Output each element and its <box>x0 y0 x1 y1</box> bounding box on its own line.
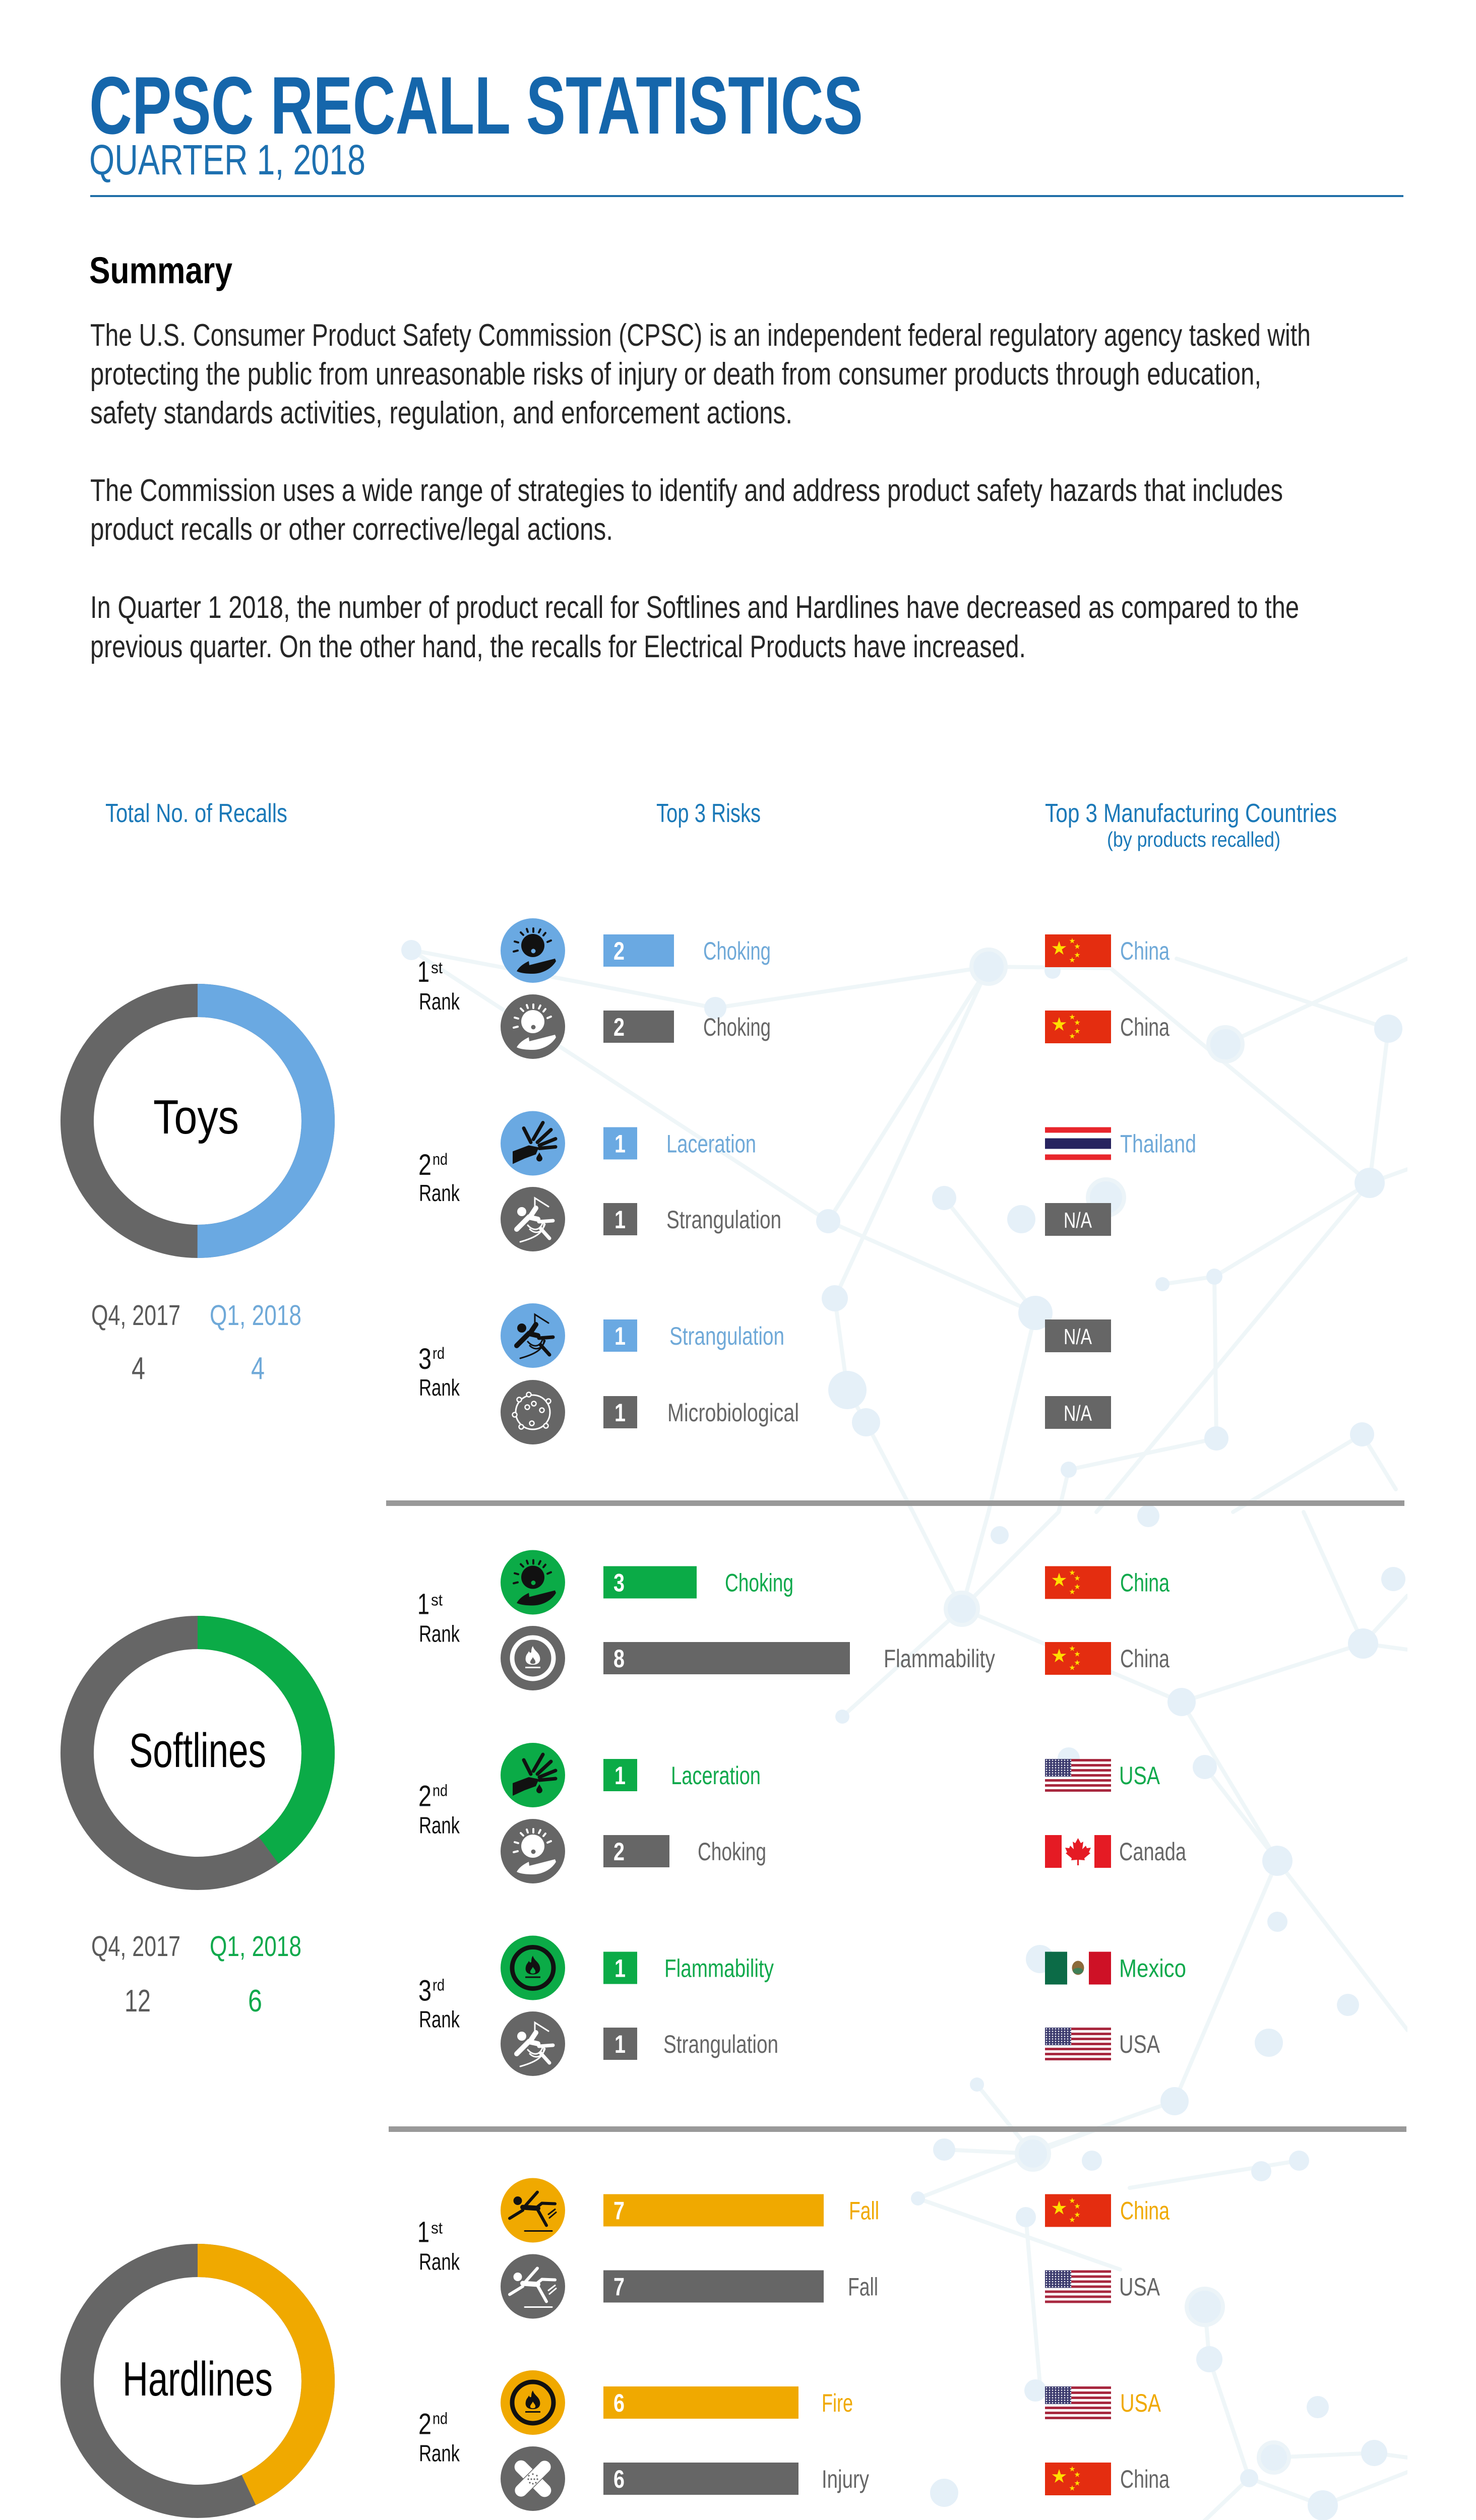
risk label: Laceration <box>666 1130 756 1158</box>
country: China <box>1120 2196 1170 2225</box>
flag: China <box>1045 2194 1111 2227</box>
risk label: Laceration <box>671 1761 761 1790</box>
risk label: Strangulation <box>663 2030 778 2058</box>
row: 1st rank Q4 2017 <box>501 1626 1170 1690</box>
bar: 6 <box>613 2389 625 2417</box>
bar: 1 <box>614 1322 626 1350</box>
risk label: Microbiological <box>667 1399 799 1427</box>
country: USA <box>1119 2273 1160 2301</box>
country: not available: N/A <box>1064 1208 1092 1233</box>
summary heading: Summary <box>89 249 232 291</box>
row: 1st rank Q4 2017 <box>501 994 1170 1059</box>
donut: hardlines <box>77 2260 318 2501</box>
quarter comparison <box>91 1299 301 1386</box>
rank labels: st <box>431 959 443 977</box>
row: 1st rank Q4 2017 <box>501 2254 1160 2318</box>
risk label: Flammability <box>664 1955 774 1983</box>
rank labels: rd <box>433 1344 445 1362</box>
panel: toys <box>77 918 1196 1444</box>
donut label: Hardlines <box>122 2352 273 2406</box>
risk label: Fall <box>848 2273 878 2301</box>
rank labels: Rank <box>419 1621 460 1647</box>
bar: 2 <box>613 1838 625 1866</box>
icon: choking <box>501 1550 565 1615</box>
bar: 1 <box>614 2030 626 2058</box>
flag: China <box>1045 1566 1111 1599</box>
row: 2nd rank Q1 2018 <box>501 2370 1161 2435</box>
row: 1st rank Q1 2018 <box>501 2178 1170 2243</box>
flag: China <box>1045 1642 1111 1675</box>
flag: Thailand <box>1045 1127 1111 1160</box>
summary text block: product recalls or other corrective/legal actions. <box>90 512 613 547</box>
quarter comparison: Q1, 2018 <box>210 1930 301 1963</box>
panel: hardlines <box>77 2178 1170 2520</box>
risk label: Strangulation <box>666 1206 781 1234</box>
quarter comparison: 4 <box>251 1351 265 1386</box>
rank labels: st <box>431 1591 443 1609</box>
country: not available: N/A <box>1064 1401 1092 1426</box>
quarter comparison: 4 <box>132 1351 145 1386</box>
icon: strangulation <box>501 1187 565 1251</box>
subtitle: QUARTER 1, 2018 <box>89 136 365 183</box>
risk label: Choking <box>698 1838 766 1866</box>
icon: choking <box>501 918 565 983</box>
country: not available: N/A <box>1064 1325 1092 1349</box>
bar: 3 <box>613 1568 625 1597</box>
risk label: Strangulation <box>669 1322 784 1350</box>
country: Thailand <box>1120 1130 1196 1158</box>
flag: USA <box>1045 2386 1111 2419</box>
country: USA <box>1119 2030 1160 2058</box>
rank labels: 2 <box>418 1149 432 1181</box>
country: China <box>1120 1568 1170 1597</box>
quarter comparison <box>91 1930 301 2019</box>
rank labels: 3 <box>418 1975 432 2007</box>
risk label: Choking <box>703 937 771 965</box>
flag: Mexico <box>1045 1951 1111 1985</box>
risk label: Injury <box>822 2465 869 2493</box>
country: not available <box>1045 1203 1111 1236</box>
bar <box>603 2463 798 2495</box>
flag: Canada <box>1045 1835 1111 1868</box>
risk label: Flammability <box>884 1645 995 1673</box>
rank labels: nd <box>433 1150 448 1168</box>
icon: microbiological <box>501 1380 565 1444</box>
column heading: top 3 manufacturing countries <box>1045 799 1337 851</box>
bar <box>603 2270 824 2302</box>
icon: injury <box>501 2446 565 2511</box>
bar: 1 <box>614 1761 626 1790</box>
flag: China <box>1045 934 1111 967</box>
donut label: Softlines <box>129 1724 266 1778</box>
icon: flammability <box>501 1626 565 1690</box>
flag: China <box>1045 2463 1111 2495</box>
icon: flammability <box>501 1935 565 2000</box>
bar: 8 <box>613 1645 625 1673</box>
quarter comparison: Q4, 2017 <box>91 1930 180 1963</box>
country: Mexico <box>1119 1955 1186 1983</box>
rank labels: st <box>431 2219 443 2237</box>
rank labels: 3 <box>418 1343 432 1375</box>
icon: strangulation <box>501 2011 565 2076</box>
bar <box>603 1642 850 1674</box>
row: 2nd rank Q1 2018 <box>501 1111 1196 1175</box>
icon: laceration <box>501 1111 565 1175</box>
rank labels: Rank <box>419 1812 460 1839</box>
bar <box>603 934 674 967</box>
row: 1st rank Q1 2018 <box>501 918 1170 983</box>
bar <box>603 1203 637 1235</box>
quarter comparison: 6 <box>248 1984 262 2019</box>
row: 2nd rank Q1 2018 <box>501 1743 1160 1807</box>
rank labels: nd <box>433 1781 448 1799</box>
bar <box>603 2028 637 2060</box>
flag: USA <box>1045 2028 1111 2060</box>
panel: softlines <box>77 1550 1186 2076</box>
rank labels: Rank <box>419 1180 460 1206</box>
rank labels: Rank <box>419 2006 460 2032</box>
risk label: Fire <box>822 2389 853 2417</box>
summary text block: safety standards activities, regulation, and enforcement actions. <box>90 396 792 430</box>
icon: fall <box>501 2254 565 2318</box>
row: 3rd rank Q4 2017 <box>501 1380 1111 1444</box>
column heading: top 3 manufacturing countries: (by products recalled) <box>1107 828 1280 851</box>
row: 3rd rank Q1 2018 <box>501 1935 1186 2000</box>
rank labels: rd <box>433 1976 445 1994</box>
bar: 1 <box>614 1206 626 1234</box>
rank labels: Rank <box>419 1374 460 1401</box>
row: 3rd rank Q4 2017 <box>501 2011 1160 2076</box>
rank labels: Rank <box>419 2249 460 2275</box>
rank labels: 1 <box>417 2216 429 2249</box>
quarter comparison: Q1, 2018 <box>210 1299 301 1332</box>
quarter comparison: Q4, 2017 <box>91 1299 180 1332</box>
country: Canada <box>1119 1838 1186 1866</box>
summary text block: previous quarter. On the other hand, the recalls for Electrical Products have increased. <box>90 629 1026 664</box>
country: China <box>1120 1013 1170 1041</box>
column heading: total recalls: Total No. of Recalls <box>105 799 287 828</box>
country: China <box>1120 937 1170 965</box>
bar <box>603 1835 669 1867</box>
bar <box>603 1011 674 1043</box>
country: USA <box>1120 2389 1161 2417</box>
bar <box>603 1566 697 1599</box>
donut label: Toys <box>153 1090 239 1144</box>
flag: China <box>1045 1011 1111 1043</box>
rank labels: 2 <box>418 2408 432 2440</box>
risk label: Fall <box>849 2196 879 2225</box>
row: 2nd rank Q4 2017 <box>501 1187 1111 1251</box>
bar: 6 <box>613 2465 625 2493</box>
rank labels: 2 <box>418 1780 432 1812</box>
donut: softlines <box>77 1632 318 1873</box>
risk label: Choking <box>725 1568 793 1597</box>
country: China <box>1120 1645 1170 1673</box>
bar <box>603 2194 824 2227</box>
rank labels: 1 <box>417 956 429 988</box>
bar <box>603 1319 637 1352</box>
rank labels: 1 <box>417 1588 429 1621</box>
icon: fall <box>501 2178 565 2243</box>
donut: toys <box>77 1000 318 1241</box>
risk label: Choking <box>703 1013 771 1041</box>
country: not available <box>1045 1319 1111 1352</box>
bar: 1 <box>614 1955 626 1983</box>
bar <box>603 1759 637 1791</box>
icon: choking <box>501 1819 565 1883</box>
summary text block <box>90 318 1311 664</box>
header rule <box>90 195 1403 197</box>
row: 2nd rank Q4 2017 <box>501 1819 1186 1883</box>
icon: laceration <box>501 1743 565 1807</box>
column heading: top 3 manufacturing countries: Top 3 Manufacturing Countries <box>1045 799 1337 828</box>
title: CPSC RECALL STATISTICS <box>89 60 863 151</box>
country: USA <box>1119 1761 1160 1790</box>
flag: USA <box>1045 2270 1111 2303</box>
rank labels <box>417 956 460 1401</box>
country: China <box>1120 2465 1170 2493</box>
bar <box>603 1951 637 1984</box>
bar <box>603 1127 637 1159</box>
icon: fire <box>501 2370 565 2435</box>
bar: 2 <box>613 1013 625 1041</box>
row: 1st rank Q1 2018 <box>501 1550 1170 1615</box>
bar <box>603 1396 637 1428</box>
row: 2nd rank Q4 2017 <box>501 2446 1170 2511</box>
bar: 7 <box>613 2196 625 2225</box>
country: not available <box>1045 1396 1111 1429</box>
rank labels <box>417 2216 460 2520</box>
quarter comparison: 12 <box>125 1984 151 2019</box>
rank labels: Rank <box>419 2440 460 2467</box>
rank labels: nd <box>433 2409 448 2427</box>
icon: strangulation <box>501 1303 565 1368</box>
column heading: top 3 risks: Top 3 Risks <box>656 799 761 828</box>
rank labels: Rank <box>419 988 460 1015</box>
flag: USA <box>1045 1759 1111 1792</box>
icon: choking <box>501 994 565 1059</box>
row: 3rd rank Q1 2018 <box>501 1303 1111 1368</box>
bar: 1 <box>614 1399 626 1427</box>
rank labels <box>417 1588 460 2032</box>
bar <box>603 2386 798 2419</box>
bar: 7 <box>613 2273 625 2301</box>
bar: 2 <box>613 937 625 965</box>
background network of pale nodes <box>401 940 1409 2520</box>
bar: 1 <box>614 1130 626 1158</box>
